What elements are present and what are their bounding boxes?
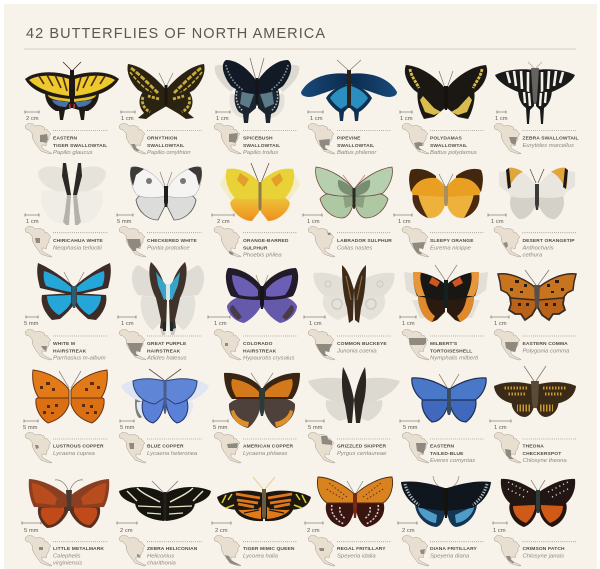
species label: Neophasia terlootii (53, 245, 102, 251)
scale bar: 2 cm (402, 528, 415, 534)
species label (243, 439, 297, 457)
species label (336, 336, 391, 354)
title: 42 BUTTERFLIES OF NORTH AMERICA (26, 26, 325, 42)
species label: WHITE M (53, 341, 75, 347)
specimen: eastern tiger swallowtail (25, 62, 119, 156)
species label: Battus philenor (337, 150, 377, 156)
range map (402, 330, 429, 360)
range map (119, 330, 146, 360)
species label (522, 130, 579, 149)
species label: CHECKERED WHITE (147, 238, 198, 244)
species label: Colias nastes (337, 245, 372, 251)
scale bar: 1 cm (400, 116, 413, 122)
scale bar: 1 cm (121, 321, 134, 327)
species label: Speyeria diana (430, 553, 470, 559)
scale bar: 5 mm (117, 219, 132, 225)
species label (243, 130, 297, 156)
species label: charithonia (147, 561, 177, 567)
scale bar: 5 mm (308, 425, 323, 431)
scale bar: 1 cm (398, 219, 411, 225)
specimen: crimson patch (493, 479, 577, 566)
species label: TORTOISESHELL (430, 348, 472, 354)
specimen: diana fritillary (398, 476, 491, 566)
species label: COMMON BUCKEYE (337, 341, 387, 347)
range map (119, 124, 146, 154)
range map (119, 226, 146, 257)
species label (147, 542, 202, 567)
range map (214, 536, 241, 566)
scale bar: 1 cm (309, 321, 322, 327)
butterfly: polydamas swallowtail (405, 65, 487, 119)
species label: GREAT PURPLE (147, 341, 187, 347)
species label (243, 336, 297, 362)
species label: Chlosyne theona (522, 458, 567, 464)
specimen: great purple hairstreak (118, 262, 204, 362)
scale bar: 5 mm (24, 321, 39, 327)
species label: REGAL FRITILLARY (337, 546, 386, 552)
species label: TIGER MIMIC QUEEN (243, 546, 295, 552)
scale bar: 1 cm (216, 116, 229, 122)
species label: EASTERN (430, 444, 455, 450)
species label: SPICEBUSH (243, 136, 273, 142)
species label: ORANGE-BARRED (243, 238, 289, 244)
species label: PIPEVINE (337, 136, 361, 142)
species label: Phoebis philea (243, 253, 282, 259)
scale bar: 1 cm (214, 321, 227, 327)
butterfly: orange-barred sulphur (220, 163, 300, 221)
species label: Nymphalis milberti (430, 356, 479, 362)
butterfly: tiger mimic queen (217, 477, 311, 521)
butterfly: desert orangetip (499, 168, 575, 219)
scale bar (495, 110, 508, 122)
scale bar: 1 cm (310, 116, 323, 122)
species label: SWALLOWTAIL (243, 143, 280, 149)
species label: MILBERT'S (430, 341, 458, 347)
specimen: zebra heliconian (117, 481, 211, 567)
species label: virginiensis (53, 561, 82, 567)
species label (243, 233, 297, 259)
species label: CRIMSON PATCH (522, 546, 565, 552)
range map (119, 536, 146, 566)
species label: Chlosyne janais (522, 553, 564, 559)
range map (25, 124, 52, 154)
specimen: blue copper (119, 369, 209, 463)
specimen: theona checkerspot (490, 366, 577, 464)
species label: Heliconius (147, 553, 174, 559)
range map (25, 432, 52, 463)
range map (494, 226, 521, 257)
range map (214, 226, 241, 257)
butterfly: zebra heliconian (119, 481, 211, 521)
species label: HAIRSTREAK (147, 348, 181, 354)
species label: CHECKERSPOT (522, 451, 561, 457)
species label: SWALLOWTAIL (337, 143, 374, 149)
scale bar: 1 cm (494, 321, 507, 327)
specimen: grizzled skipper (306, 367, 400, 463)
species label: Battus polydamus (430, 150, 477, 156)
species label: LABRADOR SULPHUR (337, 238, 392, 244)
species label (522, 233, 577, 259)
species label (522, 542, 577, 559)
species label (146, 336, 202, 362)
species label: Papilio ornythion (147, 150, 191, 156)
specimen: pipevine swallowtail (301, 60, 397, 156)
specimen: ornythion swallowtail (119, 64, 205, 156)
range map (25, 226, 52, 257)
species label: Junonia coenia (336, 348, 377, 354)
scale bar: 5 mm (213, 425, 228, 431)
butterfly: eastern tailed-blue (412, 374, 486, 422)
butterfly: eastern comma (498, 270, 576, 320)
butterfly: colorado hairstreak (226, 268, 298, 323)
species label: Eurema nicippe (430, 245, 472, 251)
butterfly: great purple hairstreak (132, 262, 204, 335)
range map (25, 536, 52, 566)
range map (402, 432, 429, 463)
butterfly: milbert's tortoiseshell (404, 265, 488, 322)
species label: HAIRSTREAK (243, 348, 277, 354)
scale bar: 1 cm (402, 321, 415, 327)
butterfly: eastern tiger swallowtail (25, 62, 119, 120)
species label: TIGER SWALLOWTAIL (53, 143, 107, 149)
species label: ZEBRA HELICONIAN (147, 546, 198, 552)
range map (308, 536, 335, 566)
range map (308, 124, 335, 154)
species label: Parrhasius m-album (53, 356, 106, 362)
specimen: zebra swallowtail (494, 62, 600, 154)
species label (430, 439, 484, 464)
butterfly: white m hairstreak (37, 263, 111, 320)
butterfly: ornythion swallowtail (127, 64, 205, 119)
species label (430, 130, 484, 156)
range map (214, 432, 241, 463)
scale bar: 2 cm (217, 219, 230, 225)
scale bar: 1 cm (26, 219, 39, 225)
range map (308, 432, 335, 463)
species label (522, 439, 577, 464)
specimen: eastern comma (491, 270, 577, 360)
range map (214, 330, 241, 360)
scale bar: 1 cm (493, 528, 506, 534)
species label: POLYDAMAS (430, 136, 462, 142)
butterfly: diana fritillary (401, 476, 491, 527)
scale bar: 5 mm (24, 528, 39, 534)
species label (337, 542, 391, 559)
scale bar: 1 cm (495, 116, 508, 122)
species label (147, 233, 202, 251)
species label: Atlides halesus (146, 356, 187, 362)
species label: Hypaurotis crysalus (243, 356, 294, 362)
scale bar: 1 cm (494, 425, 507, 431)
specimen: desert orangetip (488, 168, 577, 259)
species label: Speyeria idalia (337, 553, 376, 559)
species label: TAILED-BLUE (430, 451, 464, 457)
butterfly: blue copper (121, 369, 209, 423)
range map (494, 124, 521, 154)
range map (308, 226, 335, 257)
species label (147, 130, 202, 156)
specimen: milbert's tortoiseshell (400, 265, 488, 362)
species label: Lycaena heteronea (147, 451, 198, 457)
butterfly: zebra swallowtail (495, 62, 600, 124)
species label: ZEBRA SWALLOWTAIL (522, 136, 579, 142)
butterfly: theona checkerspot (494, 366, 576, 417)
species label (53, 336, 108, 362)
range map (119, 432, 146, 463)
butterfly: sleepy orange (409, 169, 483, 218)
specimen: white m hairstreak (24, 263, 111, 362)
scale bar: 2 cm (307, 528, 320, 534)
scale bar: 2 cm (26, 116, 39, 122)
species label: Pontia protodice (147, 245, 190, 251)
specimen: labrador sulphur (303, 167, 392, 257)
species label (430, 336, 484, 362)
scale bar: 5 mm (120, 425, 135, 431)
species label: Eurytides marcellus (522, 143, 574, 149)
range map (402, 226, 429, 257)
specimen: lustrous copper (23, 370, 145, 463)
specimen: eastern tailed-blue (400, 374, 486, 464)
species label (522, 336, 577, 354)
species label: AMERICAN COPPER (243, 444, 294, 450)
scale bar: 1 cm (491, 219, 504, 225)
species label: cethura (522, 253, 543, 259)
species label: LITTLE METALMARK (53, 546, 104, 552)
range map (494, 432, 521, 463)
butterfly: grizzled skipper (308, 367, 400, 423)
species label (243, 542, 297, 559)
species label: Calephelis (53, 553, 81, 559)
species label: Everes comyntas (430, 458, 475, 464)
species label (337, 233, 392, 251)
species label: EASTERN (53, 136, 78, 142)
specimen: orange-barred sulphur (212, 163, 300, 259)
butterfly: little metalmark (29, 479, 109, 528)
species label (53, 439, 108, 457)
specimen: polydamas swallowtail (400, 65, 487, 156)
species label: Lycaena phlaeas (243, 451, 287, 457)
species label (337, 439, 391, 457)
butterfly: lustrous copper (33, 370, 145, 423)
range map (402, 536, 429, 566)
specimen: chiricahua white (25, 163, 108, 257)
species label (147, 439, 202, 457)
scale bar: 2 cm (120, 528, 133, 534)
species label: EASTERN COMMA (522, 341, 568, 347)
specimen: american copper (213, 373, 300, 463)
specimen: sleepy orange (394, 169, 484, 257)
species label: SWALLOWTAIL (430, 143, 467, 149)
butterfly: pipevine swallowtail (301, 60, 397, 121)
butterfly: chiricahua white (38, 163, 106, 225)
butterfly: spicebush swallowtail (215, 58, 299, 123)
species label: SWALLOWTAIL (147, 143, 184, 149)
specimen: spicebush swallowtail (214, 58, 299, 156)
species label: COLORADO (243, 341, 273, 347)
species label: Lycorea halia (243, 553, 279, 559)
scale bar: 1 cm (307, 219, 320, 225)
species label: DESERT ORANGETIP (522, 238, 575, 244)
species label (430, 542, 484, 559)
species label: Polygonia comma (522, 348, 570, 354)
species label: THEONA (522, 444, 544, 450)
range map (214, 124, 241, 154)
scale bar: 5 mm (23, 425, 38, 431)
species label: SLEEPY ORANGE (430, 238, 474, 244)
butterfly: regal fritillary (317, 477, 393, 527)
scale bar: 1 cm (121, 116, 134, 122)
butterfly: checkered white (130, 167, 202, 220)
specimen: colorado hairstreak (208, 268, 298, 362)
species label: LUSTROUS COPPER (53, 444, 104, 450)
species label: HAIRSTREAK (53, 348, 87, 354)
species label (53, 542, 108, 567)
species label (53, 233, 108, 251)
specimen: little metalmark (22, 479, 109, 567)
butterfly: labrador sulphur (316, 167, 392, 218)
species label: DIANA FRITILLARY (430, 546, 478, 552)
species label (430, 233, 484, 251)
species label: Papilio glaucus (53, 150, 93, 156)
species label: ORNYTHION (147, 136, 178, 142)
species label: Anthocharis (522, 245, 554, 251)
species label (53, 130, 108, 156)
specimen: common buckeye (304, 265, 394, 360)
range map (308, 330, 335, 360)
specimen: regal fritillary (305, 477, 393, 566)
range map (494, 536, 521, 566)
butterfly: crimson patch (501, 479, 575, 527)
butterfly: american copper (224, 373, 300, 428)
specimen: checkered white (117, 167, 202, 257)
species label: GRIZZLED SKIPPER (337, 444, 387, 450)
species label: Papilio troilus (243, 150, 278, 156)
scale bar: 5 mm (403, 425, 418, 431)
species label: Lycaena cuprea (53, 451, 96, 457)
butterfly: common buckeye (314, 265, 394, 323)
species label (337, 130, 391, 156)
species label: SULPHUR (243, 245, 268, 251)
range map (494, 330, 521, 360)
range map (402, 124, 429, 154)
specimen: tiger mimic queen (212, 477, 311, 566)
species label: BLUE COPPER (147, 444, 184, 450)
species label: Pyrgus centaureae (337, 451, 387, 457)
species label: CHIRICAHUA WHITE (53, 238, 103, 244)
scale bar: 2 cm (215, 528, 228, 534)
range map (25, 330, 52, 360)
